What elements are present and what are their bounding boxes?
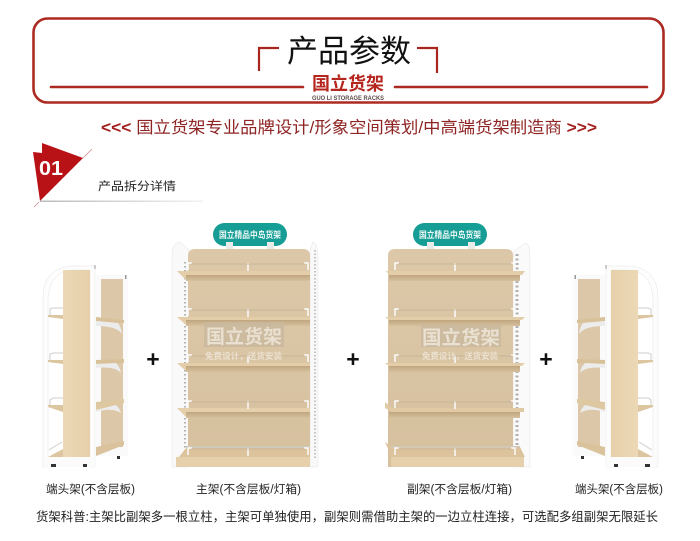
secondary rack watermark: 免费设计，送货安装 [422,351,498,361]
product: main rack [172,223,318,467]
caption: secondary rack: 副架(不含层板/灯箱) [407,482,512,496]
main rack watermark [204,322,284,361]
brand logo: 国立货架 [312,73,384,94]
plus sign 3: + [539,346,553,372]
header rule right [395,86,647,88]
shelves [385,263,525,467]
title bracket right [417,48,437,73]
caption: main rack: 主架(不含层板/灯箱) [196,482,301,496]
product: left end rack [43,265,128,467]
header rule left [51,86,303,88]
secondary rack sign [413,223,487,250]
title bracket left [259,48,279,71]
section badge 01: 01 [39,158,63,180]
panel: header frame [34,18,664,102]
secondary rack watermark: 国立货架 [422,326,500,349]
section badge 01 [33,143,92,207]
footnote: 货架科普:主架比副架多一根立柱，主架可单独使用，副架则需借助主架的一边立柱连接，可选配多组副架无限延长 [36,509,658,524]
main rack watermark: 国立货架 [206,325,282,348]
secondary rack watermark [421,325,501,361]
section subtitle: 产品拆分详情 [98,179,177,193]
plus sign 2: + [346,346,360,372]
caption: right end rack: 端头架(不含层板) [575,482,663,496]
subtitle rule [40,200,203,202]
main rack sign: 国立精品中岛货架 [219,229,281,240]
product: secondary rack [385,223,530,467]
brand logo [312,73,385,102]
main rack sign [213,223,287,250]
plus sign 1: + [146,346,160,372]
tagline: <<< 国立货架专业品牌设计/形象空间策划/中高端货架制造商 >>> [101,118,597,137]
secondary rack sign: 国立精品中岛货架 [419,229,481,240]
brand logo: GUO LI STORAGE RACKS [312,95,385,102]
product: right end rack [573,265,658,467]
title: 产品参数 [287,34,411,69]
shelves [176,263,310,467]
caption: left end rack: 端头架(不含层板) [46,482,135,496]
main rack watermark: 免费设计，送货安装 [205,351,282,361]
